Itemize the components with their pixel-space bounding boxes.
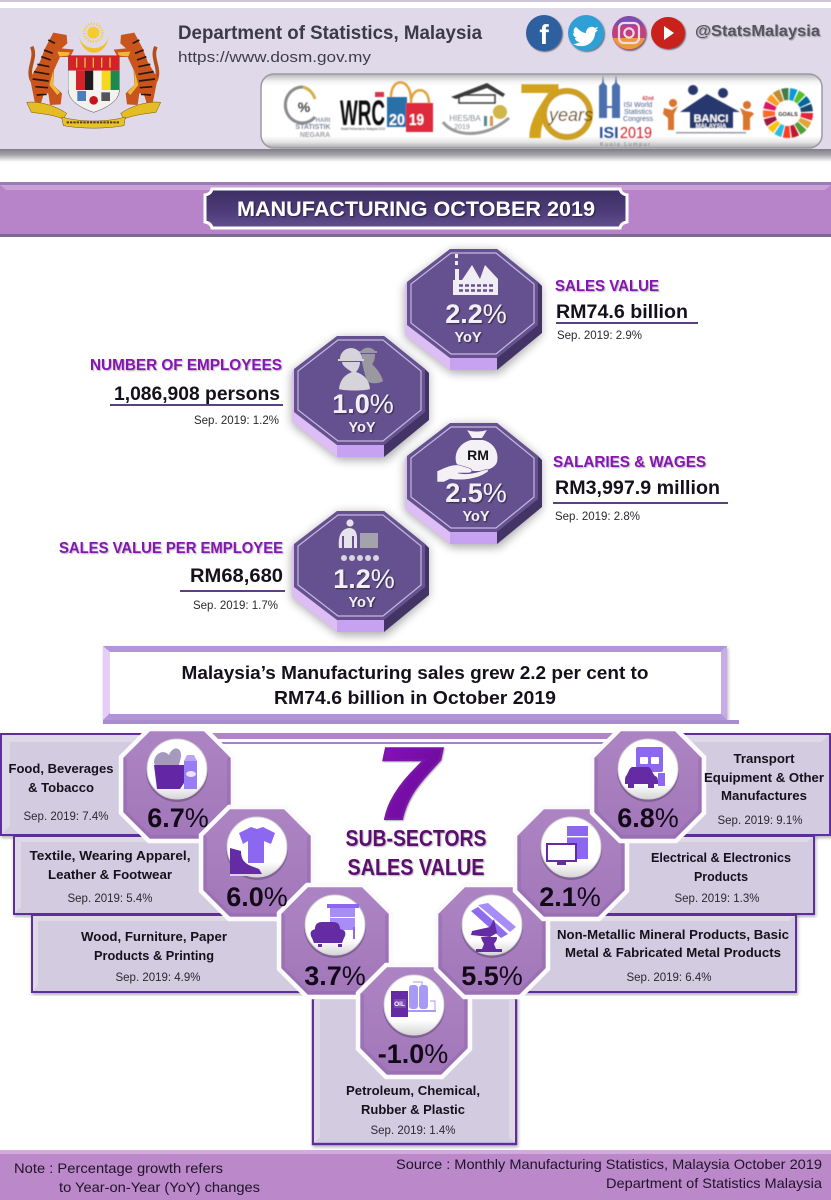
logo: ISI 2019: Congress: [623, 116, 653, 123]
label: petroleum: Rubber & Plastic: [361, 1102, 465, 1117]
logo: 70 years: [518, 67, 593, 155]
source: [396, 1156, 822, 1191]
heading: 7 sub-sectors: [346, 727, 486, 880]
stat text: employees: [90, 357, 283, 427]
label: electrical: [651, 850, 791, 905]
stat text: salaries: SALARIES & WAGES: [553, 454, 706, 471]
stat text: sales per employee: RM68,680: [190, 566, 283, 587]
panel: electrical box: [571, 836, 814, 914]
icon: youtube: [651, 17, 685, 49]
label: textile: Sep. 2019: 5.4%: [68, 893, 152, 905]
logo: SDG wheel: GOALS: [778, 112, 798, 118]
stat text: employees: 1,086,908 persons: [114, 384, 280, 405]
stat badge: sales per employee: [292, 511, 429, 635]
icon: fridge and monitor: [547, 826, 588, 865]
icon: groceries: [154, 748, 197, 789]
stat text: sales per employee: SALES VALUE PER EMPLOYEE: [59, 540, 283, 557]
icon: Malaysia coat of arms: [27, 24, 161, 128]
icon panel: transport: [592, 729, 704, 841]
stat text: salaries: RM3,997.9 million: [555, 478, 720, 499]
icon: twitter: [568, 15, 604, 51]
header text: department: https://www.dosm.gov.my: [178, 49, 372, 66]
stat text: salaries: Sep. 2019: 2.8%: [555, 511, 640, 523]
label: wood: Wood, Furniture, Paper: [81, 929, 227, 944]
logo: household survey: 2019: [454, 124, 470, 131]
logo: ISI 2019: Statistics: [624, 109, 652, 116]
icon: money bag in hand: RM: [467, 447, 489, 463]
icon: furniture: [311, 904, 359, 947]
title plaque: MANUFACTURING OCTOBER 2019: [237, 198, 595, 221]
panel: metals box: [492, 915, 796, 992]
icon panel: food: [121, 729, 233, 841]
icon: oil barrel and tanks: OIL: [394, 1001, 405, 1008]
logo: household survey: HIES/BA: [449, 114, 481, 123]
label: wood: [81, 929, 227, 984]
header band: [0, 0, 831, 162]
stat badge: employees: 1.0%: [332, 389, 394, 419]
stat: electrical growth: 2.1%: [539, 882, 601, 912]
logo: census: BANCI: [694, 113, 728, 125]
stat badge: sales value: [405, 249, 542, 373]
stat text: sales value: SALES VALUE: [555, 278, 659, 295]
stat badge: salaries: 2.5%: [445, 478, 507, 508]
stat: food growth: 6.7%: [147, 803, 209, 833]
label: wood: Products & Printing: [94, 948, 214, 963]
social icons: [526, 15, 685, 51]
source: Source : Monthly Manufacturing Statistics, Malaysia October 2019: [396, 1156, 822, 1172]
icon panel: petroleum: [358, 965, 470, 1077]
heading: 7 sub-sectors: 7: [376, 727, 443, 841]
logo: 70 years: years: [547, 105, 593, 125]
callout: Malaysia’s Manufacturing sales grew 2.2 per cent to: [182, 663, 648, 683]
logo: census: [663, 85, 754, 134]
stat badge: sales per employee: 1.2%: [333, 564, 395, 594]
label: transport: Sep. 2019: 9.1%: [718, 815, 802, 827]
icon: truck and car: [625, 747, 665, 788]
title banner: [0, 182, 831, 237]
icon: worker at conveyor: [339, 519, 379, 561]
stat text: sales value: Sep. 2019: 2.9%: [557, 330, 642, 342]
label: electrical: Electrical & Electronics: [651, 850, 791, 865]
logo: statistics day: NEGARA: [300, 132, 330, 139]
logo: statistics day: %: [298, 99, 311, 115]
stat text: sales per employee: Sep. 2019: 1.7%: [193, 600, 278, 612]
stat badge: sales value: YoY: [454, 330, 482, 346]
stat badge: salaries: YoY: [462, 509, 490, 525]
note: to Year-on-Year (YoY) changes: [59, 1179, 260, 1195]
logo: census: MALAYSIA: [696, 124, 727, 130]
logo: statistics day: [285, 87, 331, 139]
logo: statistics day: STATISTIK: [295, 124, 331, 131]
panel: textile box: [14, 836, 259, 914]
note: Note : Percentage growth refers: [14, 1160, 223, 1176]
panel: wood box: [32, 915, 337, 992]
stat text: sales per employee: [59, 540, 285, 612]
callout: [103, 646, 739, 724]
stat: metals growth: 5.5%: [461, 961, 523, 991]
stat badge: sales per employee: YoY: [348, 595, 376, 611]
logo: ISI 2019: ISI World: [624, 102, 652, 109]
panel: transport box: [648, 734, 830, 835]
logo: WRC 2019: 19: [409, 112, 424, 129]
header text: department: [178, 23, 482, 66]
label: food: & Tobacco: [28, 780, 94, 795]
label: petroleum: Sep. 2019: 1.4%: [370, 1125, 456, 1137]
label: electrical: Products: [694, 869, 748, 884]
stat badge: sales value: 2.2%: [445, 299, 507, 329]
icon panel: wood: [279, 885, 391, 997]
label: metals: Metal & Fabricated Metal Products: [565, 945, 781, 960]
panel: food box: [1, 734, 181, 835]
stat text: sales value: [555, 278, 698, 342]
logo: WRC 2019: WRC: [340, 94, 385, 133]
icon: facebook: f: [539, 19, 549, 50]
stat badge: employees: YoY: [348, 420, 376, 436]
label: metals: Sep. 2019: 6.4%: [626, 972, 712, 984]
heading: 7 sub-sectors: SUB-SECTORS: [346, 825, 486, 851]
stat: petroleum growth: -1.0%: [378, 1039, 448, 1069]
stat text: sales value: RM74.6 billion: [556, 302, 688, 323]
label: textile: Textile, Wearing Apparel,: [30, 848, 190, 863]
label: food: Food, Beverages: [8, 761, 113, 776]
stat: wood growth: 3.7%: [304, 961, 366, 991]
source: Department of Statistics Malaysia: [606, 1175, 822, 1191]
logo: WRC 2019: [340, 82, 433, 133]
note: [14, 1160, 260, 1195]
footer band: [0, 1150, 831, 1200]
logo: ISI 2019: [599, 75, 654, 148]
label: metals: [557, 927, 789, 984]
label: metals: Non-Metallic Mineral Products, Basic: [557, 927, 789, 942]
logo: WRC 2019: Retail Performance Malaysia 2019: [341, 127, 385, 131]
label: transport: Equipment & Other: [704, 770, 824, 785]
label: petroleum: Petroleum, Chemical,: [346, 1083, 480, 1098]
callout: RM74.6 billion in October 2019: [274, 688, 556, 708]
logo: household survey: [443, 83, 509, 134]
label: food: [8, 761, 113, 823]
title plaque: [205, 189, 627, 228]
label: electrical: Sep. 2019: 1.3%: [674, 893, 760, 905]
stat: textile growth: 6.0%: [226, 882, 288, 912]
icon panel: textile: [201, 807, 313, 919]
heading: 7 sub-sectors: SALES VALUE: [348, 854, 484, 880]
stat text: employees: Sep. 2019: 1.2%: [194, 415, 279, 427]
stat badge: salaries: [405, 423, 542, 547]
icon: instagram: [612, 16, 646, 50]
label: petroleum: [346, 1083, 480, 1137]
icon: factory: [453, 254, 498, 295]
icon panel: electrical: [515, 807, 627, 919]
stat badge: employees: [292, 336, 429, 460]
logo: ISI 2019: Kuala Lumpur: [600, 142, 650, 148]
label: food: Sep. 2019: 7.4%: [24, 811, 108, 823]
label: wood: Sep. 2019: 4.9%: [116, 972, 200, 984]
logo: 70 years: 7: [518, 67, 562, 155]
icon panel: metals: [436, 885, 548, 997]
panel: event logos: [261, 67, 822, 155]
header text: department: Department of Statistics, Malaysia: [178, 23, 482, 44]
stat text: salaries: [553, 454, 728, 523]
logo: WRC 2019: 20: [389, 112, 405, 129]
icon: facebook: [526, 15, 562, 51]
connector strip: [200, 733, 630, 744]
panel: petroleum box: [313, 985, 516, 1144]
logo: statistics day: HARI: [316, 118, 331, 124]
stat text: employees: NUMBER OF EMPLOYEES: [90, 357, 282, 374]
logo: ISI 2019: 2019: [620, 125, 652, 142]
icon: anvil and steel beams: [471, 903, 516, 952]
icon: workers: [338, 348, 383, 390]
social handle: @StatsMalaysia: [695, 23, 820, 40]
label: transport: Manufactures: [721, 788, 807, 803]
label: transport: Transport: [734, 751, 795, 766]
stat: transport growth: 6.8%: [617, 803, 679, 833]
logo: SDG wheel: [769, 94, 807, 132]
logo: ISI 2019: ISI: [599, 125, 619, 142]
label: textile: [30, 848, 190, 905]
logo: ISI 2019: 42nd: [642, 96, 654, 102]
icon: shirt and shoe: [230, 827, 275, 876]
label: textile: Leather & Footwear: [48, 867, 172, 882]
label: transport: [704, 751, 824, 827]
